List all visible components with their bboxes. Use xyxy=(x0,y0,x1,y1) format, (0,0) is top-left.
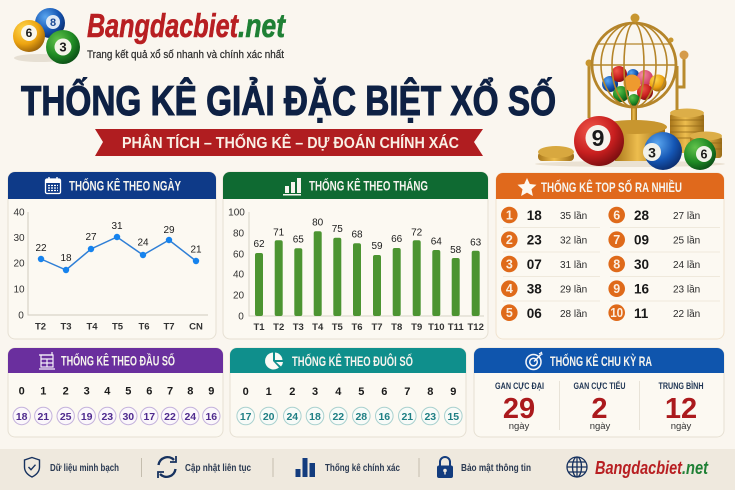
ranking list: 1 xyxy=(506,208,513,222)
stat: average: 12 xyxy=(665,393,697,425)
icon: pie chart xyxy=(265,352,283,369)
illustration: lottery cage, coins and balls xyxy=(535,14,725,170)
ranking list: 38 xyxy=(527,282,542,296)
line chart: by day: CN xyxy=(189,322,203,332)
panel: top numbers xyxy=(496,173,724,339)
digit row with counts: 4 xyxy=(335,386,342,398)
digit row with counts: 3 xyxy=(312,386,318,398)
footer brand: Bangdacbiet xyxy=(595,458,683,478)
line chart: by day: 27 xyxy=(85,232,97,243)
ball 9: 9 xyxy=(592,125,604,151)
digit row with counts: 7 xyxy=(404,386,410,398)
digit row with counts: 1 xyxy=(40,386,46,398)
stat: longest gap xyxy=(495,381,544,432)
ranking list: 2 xyxy=(506,233,513,247)
ranking list: 3 xyxy=(506,258,513,272)
digit row with counts: 9 xyxy=(450,386,456,398)
digit row with counts: 21 xyxy=(37,411,49,423)
stat: shortest gap xyxy=(574,380,626,432)
tagline: Trang kết quả xổ số nhanh và chính xác nhất xyxy=(87,49,284,61)
panel: trailing digit xyxy=(230,348,466,437)
bar chart: by month: 58 xyxy=(450,245,462,256)
logo wordmark: Bangdacbiet xyxy=(87,7,240,44)
line chart: by day: T4 xyxy=(86,322,98,332)
ranking list: 9 xyxy=(613,282,620,296)
icon: bar chart xyxy=(283,178,301,196)
top numbers header xyxy=(496,173,724,199)
digit row with counts: 7 xyxy=(167,386,173,398)
ranking list: 30 xyxy=(634,257,649,272)
digit row with counts: 6 xyxy=(381,386,387,398)
digit row with counts: 30 xyxy=(122,411,134,423)
stat: longest gap: 29 xyxy=(503,393,535,425)
digit row with counts: 2 xyxy=(289,386,295,398)
cage stand xyxy=(586,50,688,161)
bar chart: by month: T3 xyxy=(293,322,304,333)
digit row with counts: 6 xyxy=(146,386,152,398)
icon: target xyxy=(526,352,542,370)
cycle heading: THỐNG KÊ CHU KỲ RA xyxy=(550,352,652,369)
line chart: by day: T3 xyxy=(60,322,72,332)
bar chart: by month: T11 xyxy=(448,322,464,333)
ball 3: 3 xyxy=(648,144,656,160)
icon: table xyxy=(39,352,55,369)
digit row with counts: 0 xyxy=(19,386,25,398)
digit row with counts: 21 xyxy=(401,411,413,423)
stat: average: TRUNG BÌNH xyxy=(658,381,704,391)
ball 6: 6 xyxy=(701,148,708,162)
bar chart: by month xyxy=(228,208,484,333)
digit row with counts: 1 xyxy=(266,386,272,398)
ball 6 xyxy=(684,138,716,170)
panel: leading digit xyxy=(8,348,223,437)
bar chart: by month: T12 xyxy=(468,322,484,333)
ranking list: 4 xyxy=(506,282,513,296)
ranking list: 32 lần xyxy=(560,234,587,246)
ranking list: 6 xyxy=(613,208,620,222)
ranking list: 16 xyxy=(634,282,650,296)
ranking list: 24 lần xyxy=(673,259,700,271)
bar chart: by month: 71 xyxy=(273,228,285,238)
digit row with counts: 19 xyxy=(81,411,93,423)
digit row with counts: 25 xyxy=(60,411,72,423)
ranking list: 7 xyxy=(613,233,620,247)
digit row with counts: 22 xyxy=(164,411,176,423)
bar chart: by month: 68 xyxy=(351,230,363,240)
ball 9 xyxy=(574,116,624,166)
bar chart: by month: 65 xyxy=(293,234,304,246)
ranking list: 5 xyxy=(506,306,513,320)
daily header xyxy=(8,172,216,199)
bar chart: by month: 60 xyxy=(233,250,244,260)
monthly header xyxy=(223,172,488,199)
footer item: secure information: Bảo mật thông tin xyxy=(461,463,531,474)
bar chart: by month: 80 xyxy=(312,218,324,228)
trailing digit heading: THỐNG KÊ THEO ĐUÔI SỐ xyxy=(292,352,413,369)
icon: refresh arrows xyxy=(158,456,176,478)
ranking list xyxy=(501,207,720,321)
bar chart: by month: 100 xyxy=(228,208,245,218)
icon: star xyxy=(518,178,536,196)
ranking list: 18 xyxy=(527,208,542,223)
line chart: by day: T7 xyxy=(163,322,175,332)
line chart: by day: 29 xyxy=(163,225,175,236)
ranking list: 11 xyxy=(634,306,649,321)
stat: shortest gap: ngày xyxy=(590,421,611,432)
icon: shield xyxy=(24,458,40,477)
line chart: by day: 20 xyxy=(13,258,25,270)
digit row with counts: 15 xyxy=(447,411,459,423)
ranking list: 22 lần xyxy=(673,308,700,320)
panel: monthly statistics xyxy=(223,172,488,339)
bar chart: by month: 80 xyxy=(233,228,244,240)
ranking list: 27 lần xyxy=(673,210,700,222)
ranking list: 23 lần xyxy=(673,284,700,296)
ranking list: 35 lần xyxy=(560,210,587,222)
icon: globe xyxy=(567,457,587,477)
bar chart: by month: T6 xyxy=(351,322,363,333)
bar chart: by month: T8 xyxy=(391,322,402,333)
panel: cycle statistics xyxy=(474,348,724,437)
line chart: by day: 18 xyxy=(60,253,72,264)
logo: three lottery balls: 6 xyxy=(26,26,33,40)
digit row with counts: 18 xyxy=(309,411,321,423)
title: THỐNG KÊ GIẢI ĐẶC BIỆT XỔ SỐ xyxy=(21,75,556,124)
icon: padlock xyxy=(437,457,453,478)
ranking list: 25 lần xyxy=(673,234,700,246)
bar chart: by month: 75 xyxy=(332,224,343,235)
footer brand: .net xyxy=(682,458,709,478)
stat: longest gap: ngày xyxy=(509,421,530,432)
ranking list: 28 lần xyxy=(560,308,587,320)
digit row with counts: 23 xyxy=(101,411,113,423)
icon: calendar xyxy=(46,177,60,194)
line chart: by day: 0 xyxy=(18,310,24,322)
icon: bars xyxy=(296,458,315,477)
bar chart: by month: T10 xyxy=(428,322,444,333)
line chart: by day: T5 xyxy=(112,322,124,332)
coin stack right xyxy=(670,108,722,158)
bar chart: by month: 40 xyxy=(233,270,244,280)
logo: three lottery balls xyxy=(13,8,80,64)
ranking list: 28 xyxy=(634,208,650,223)
bar chart: by month: 59 xyxy=(371,241,383,252)
digit row with counts: 4 xyxy=(104,386,111,398)
stat: average: ngày xyxy=(671,421,692,432)
digit row with counts: 17 xyxy=(143,411,155,423)
leading digit heading: THỐNG KÊ THEO ĐẦU SỐ xyxy=(61,352,175,368)
ranking list: 10 xyxy=(610,306,623,320)
bar chart: by month: 64 xyxy=(431,236,442,248)
digit row with counts: 18 xyxy=(16,411,28,423)
digit row with counts: 23 xyxy=(424,411,436,423)
digit row with counts xyxy=(13,386,220,425)
ranking list: 09 xyxy=(634,232,649,248)
digit row with counts: 8 xyxy=(187,386,193,398)
digit row with counts: 16 xyxy=(205,411,217,423)
logo wordmark: .net xyxy=(238,7,287,44)
digit row with counts: 8 xyxy=(427,386,433,398)
cage wires xyxy=(592,23,676,107)
footer band xyxy=(0,449,735,490)
bar chart: by month: T1 xyxy=(253,322,265,333)
digit row with counts: 24 xyxy=(184,411,196,423)
trailing digit header xyxy=(230,348,466,373)
digit row with counts: 3 xyxy=(84,386,90,398)
subtitle ribbon: PHÂN TÍCH – THỐNG KÊ – DỰ ĐOÁN CHÍNH XÁC xyxy=(122,132,459,152)
digit row with counts: 20 xyxy=(263,411,275,423)
daily heading: THỐNG KÊ THEO NGÀY xyxy=(69,176,181,194)
digit row with counts: 5 xyxy=(358,386,364,398)
ranking list: 29 lần xyxy=(560,284,587,296)
line chart: by day: 21 xyxy=(190,244,202,256)
cycle header xyxy=(474,348,724,373)
digit row with counts: 0 xyxy=(243,386,249,398)
footer item: accurate statistics: Thống kê chính xác xyxy=(325,462,400,474)
line chart: by day: 40 xyxy=(13,208,25,218)
bar chart: by month: 62 xyxy=(253,239,265,250)
stat: average xyxy=(658,381,704,432)
ball 3 xyxy=(643,132,682,170)
stat: longest gap: GAN CỰC ĐẠI xyxy=(495,381,544,391)
flat coin xyxy=(538,146,574,161)
digit row with counts: 24 xyxy=(286,411,298,423)
bar chart: by month: 72 xyxy=(411,228,423,238)
bar chart: by month: T5 xyxy=(332,322,344,333)
panel: daily statistics xyxy=(8,172,216,339)
monthly heading: THỐNG KÊ THEO THÁNG xyxy=(309,176,428,194)
ranking list: 31 lần xyxy=(560,259,587,271)
digit row with counts: 22 xyxy=(332,411,344,423)
ranking list: 23 xyxy=(527,232,542,248)
line chart: by day: 10 xyxy=(13,284,25,296)
bar chart: by month: 63 xyxy=(470,238,482,248)
bar chart: by month: 66 xyxy=(391,234,403,245)
digit row with counts: 9 xyxy=(208,386,214,398)
stat: shortest gap: 2 xyxy=(591,393,608,425)
line chart: by day: 22 xyxy=(35,243,47,254)
subtitle ribbon xyxy=(95,129,483,156)
line chart: by day: T2 xyxy=(35,322,46,332)
bar chart: by month: T7 xyxy=(371,322,383,333)
digit row with counts: 28 xyxy=(355,411,367,423)
digit row with counts: 17 xyxy=(240,411,252,423)
digit row with counts: 5 xyxy=(125,386,131,398)
digit row with counts: 2 xyxy=(63,386,69,398)
balls inside cage xyxy=(602,66,666,106)
logo: three lottery balls: 8 xyxy=(50,17,56,29)
bar chart: by month: T2 xyxy=(273,322,284,333)
digit row with counts: 16 xyxy=(378,411,390,423)
footer item: transparent data: Dữ liệu minh bạch xyxy=(50,463,119,474)
ranking list: 06 xyxy=(527,306,542,321)
bar chart: by month: 20 xyxy=(233,290,244,302)
stat: shortest gap: GAN CỰC TIỂU xyxy=(574,380,626,391)
ranking list: 8 xyxy=(613,258,620,272)
line chart: by day: 31 xyxy=(111,221,123,232)
line chart: by day xyxy=(13,208,208,332)
footer item: continuous updates: Cập nhật liên tục xyxy=(185,463,251,474)
logo: three lottery balls: 3 xyxy=(59,40,67,54)
bar chart: by month: T9 xyxy=(411,322,422,333)
bar chart: by month: 0 xyxy=(238,312,244,322)
digit row with counts xyxy=(237,386,462,425)
line chart: by day: T6 xyxy=(138,322,150,332)
bar chart: by month: T4 xyxy=(312,322,324,333)
ranking list: 07 xyxy=(527,257,542,272)
line chart: by day: 24 xyxy=(137,238,149,248)
leading digit header xyxy=(8,348,223,373)
line chart: by day: 30 xyxy=(13,233,25,244)
